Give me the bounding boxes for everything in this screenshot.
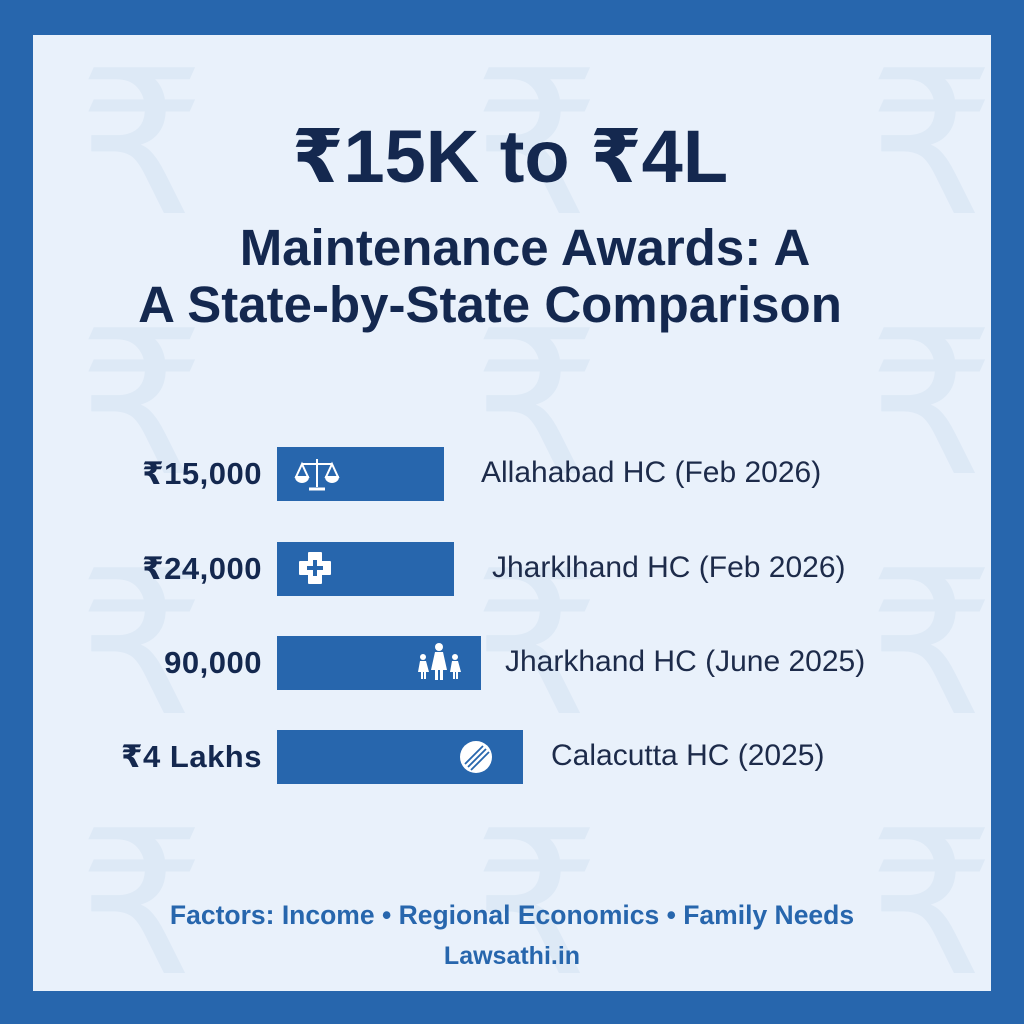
panel: inner background: ₹: [473, 288, 600, 521]
panel: inner background: ₹: [78, 528, 205, 761]
row 1: Allahabad: Allahabad HC (Feb 2026): [481, 456, 821, 489]
subtitle: A State-by-State Comparison: [138, 276, 842, 333]
row 4: Calcutta: Calacutta HC (2025): [551, 739, 824, 772]
row 3: Jharkhand June: Jharkhand HC (June 2025): [505, 645, 865, 678]
icon: ball: [460, 741, 492, 773]
footer: website: Lawsathi.in: [444, 942, 580, 970]
row 3: Jharkhand June: [164, 636, 865, 690]
panel: inner background: ₹: [473, 528, 600, 761]
icon: scales: [294, 459, 340, 490]
row 1: Allahabad: ₹15,000: [142, 456, 262, 491]
row 4: Calcutta: [121, 730, 824, 784]
title: ₹15K to ₹4L: [292, 115, 728, 198]
icon: family: [418, 643, 461, 680]
row 3: Jharkhand June: 90,000: [164, 645, 262, 680]
icon: medical cross: [299, 552, 331, 584]
footer: factors: Factors: Income • Regional Economics • Family Needs: [170, 900, 854, 930]
subtitle: [138, 219, 842, 333]
panel: inner background: ₹: [78, 288, 205, 521]
subtitle: Maintenance Awards: A: [240, 219, 810, 276]
row 2: Jharkhand Feb: [142, 542, 846, 596]
row 4: Calcutta: ₹4 Lakhs: [121, 739, 262, 774]
row 2: Jharkhand Feb: ₹24,000: [142, 551, 262, 586]
row 1: Allahabad: [142, 447, 821, 501]
row 2: Jharkhand Feb: Jharklhand HC (Feb 2026): [492, 551, 846, 584]
